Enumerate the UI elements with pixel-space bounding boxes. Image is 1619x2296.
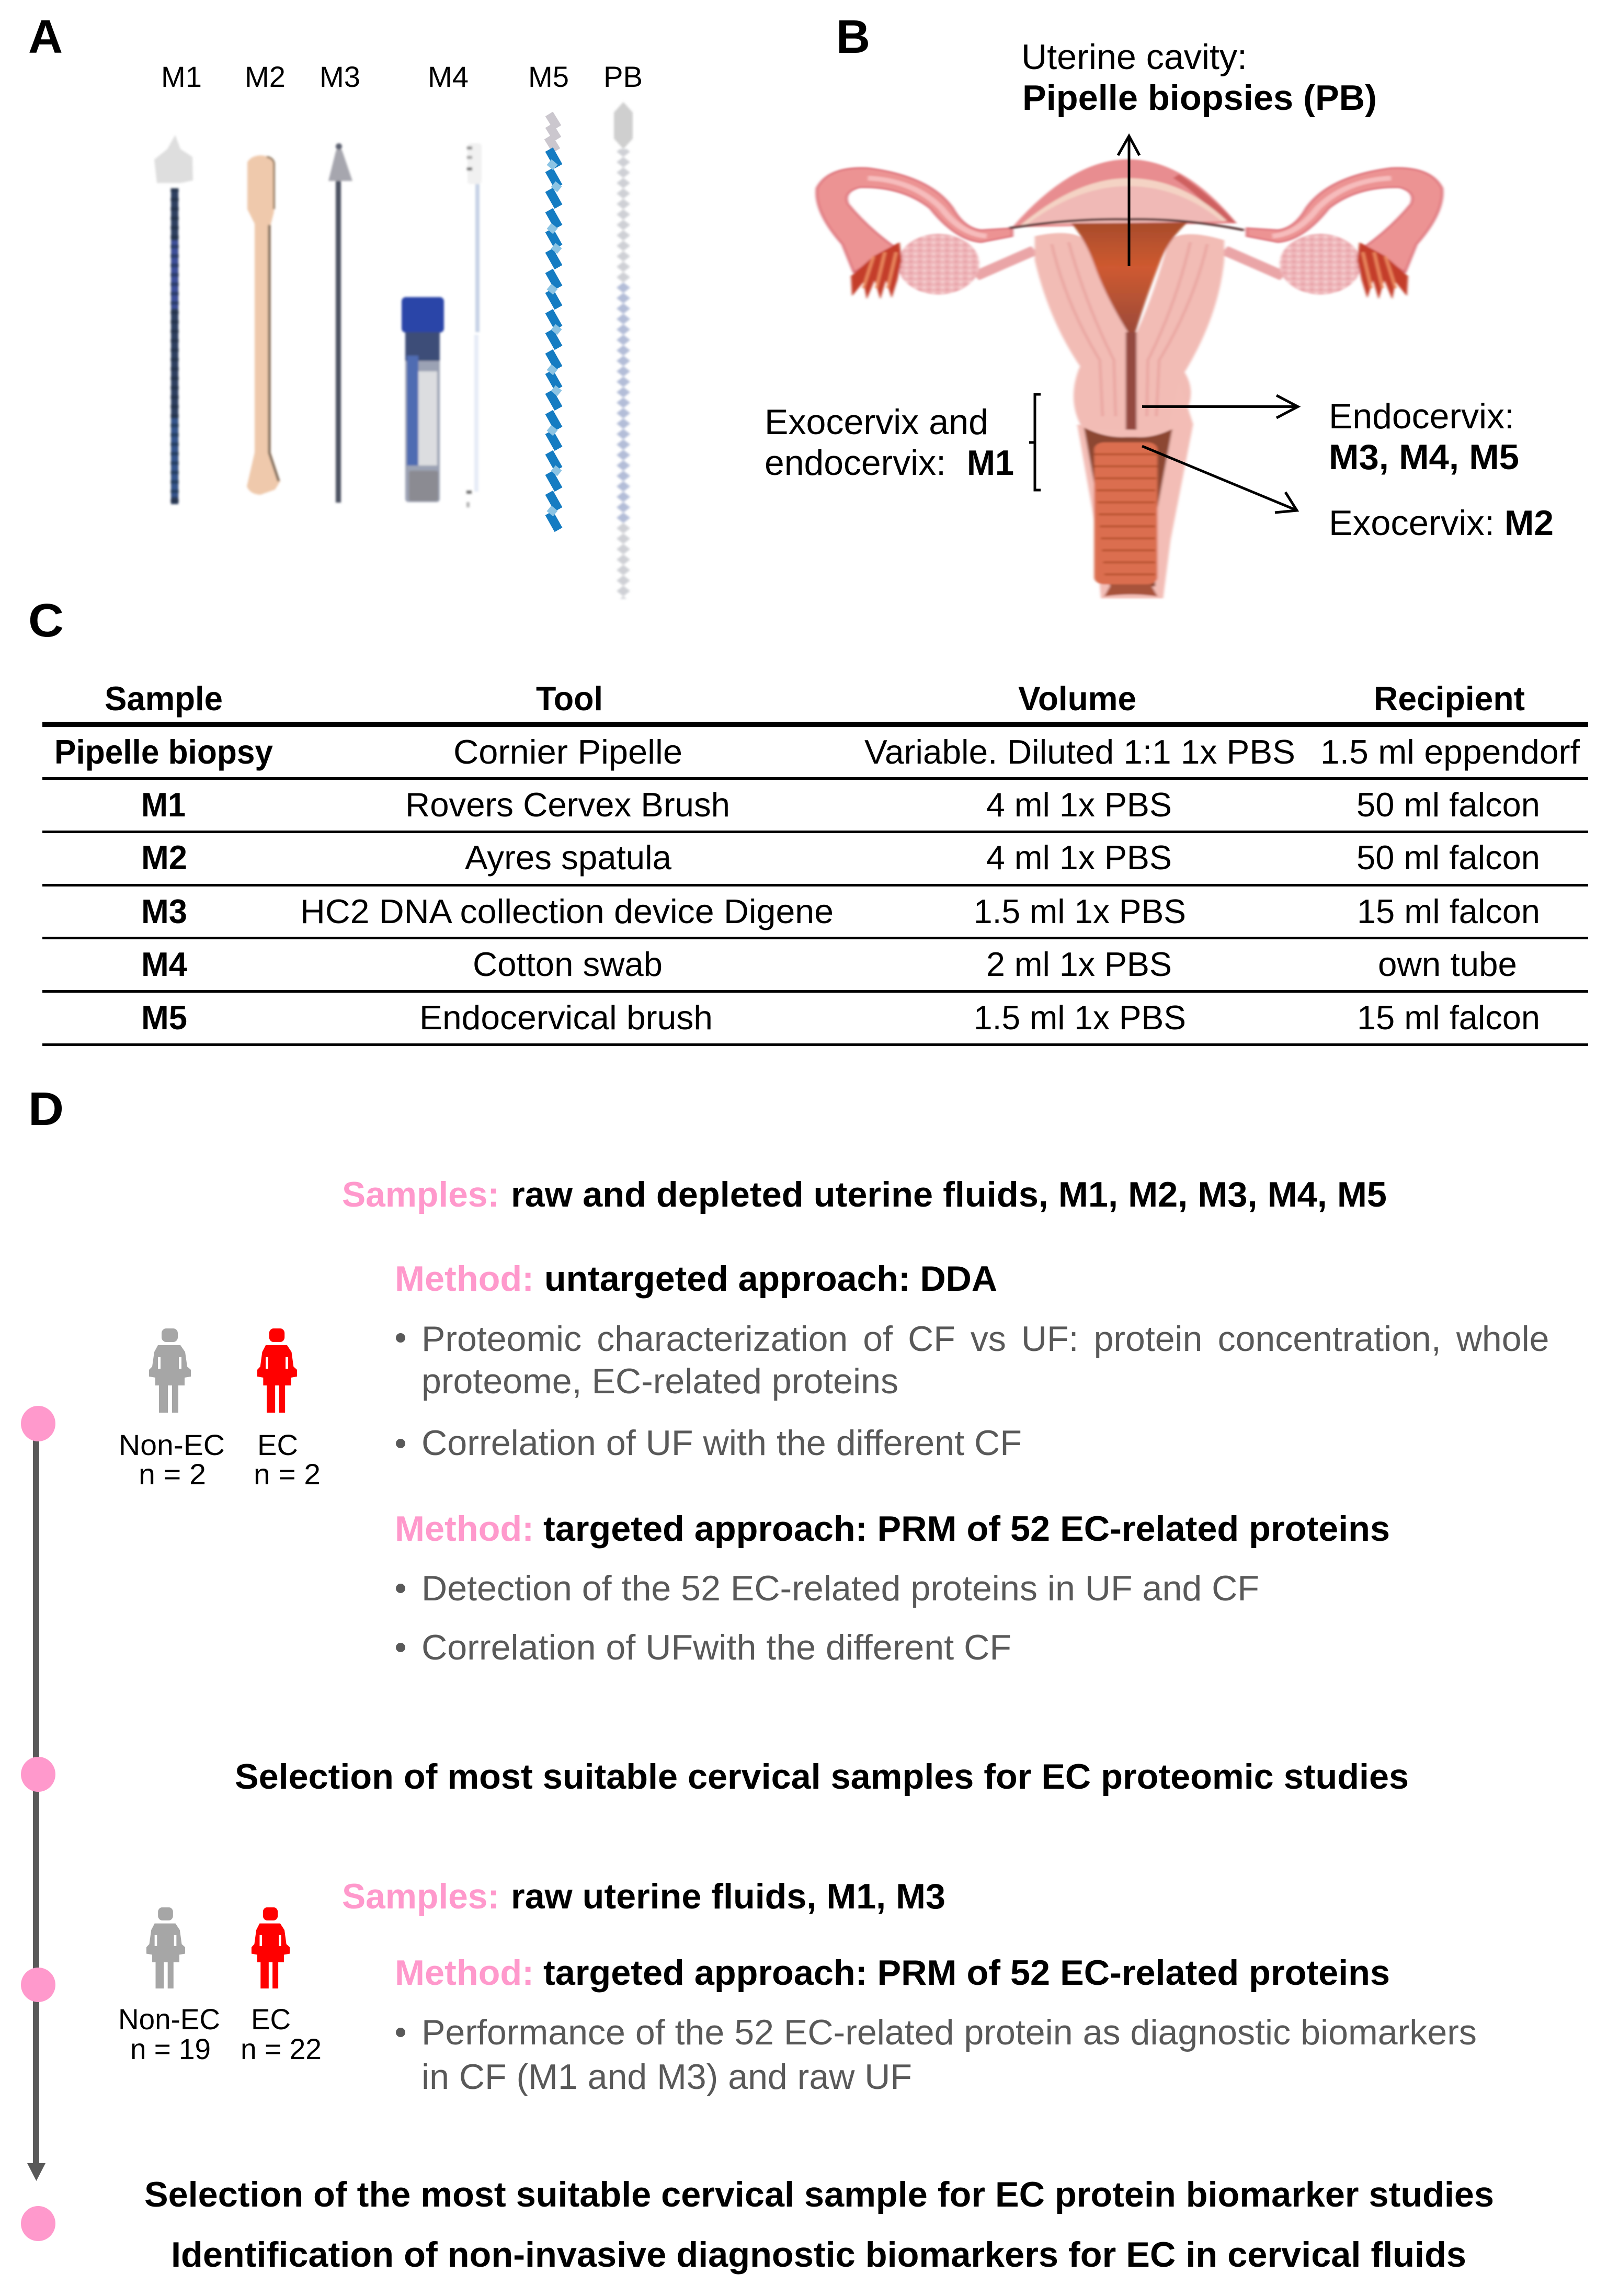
row: M4: 2 ml 1x PBS <box>986 945 1172 983</box>
tool labels: PB <box>603 60 643 93</box>
bullet: biomarker performance: in CF (M1 and M3) and raw UF <box>421 2057 912 2097</box>
row: M2: M2 <box>141 838 187 877</box>
table header: Tool <box>536 679 603 718</box>
tool labels: M1 <box>161 60 202 93</box>
label: exocervix and endocervix <box>765 402 1014 483</box>
illustration: female reproductive tract <box>817 160 1442 598</box>
panel D: study workflow <box>21 1083 1549 2275</box>
row: M2: Ayres spatula <box>465 838 672 877</box>
table row lines <box>42 777 1588 1046</box>
bracket: exocervix and endocervix <box>1029 394 1041 490</box>
tool labels: M3 <box>320 60 360 93</box>
row: M3: 15 ml falcon <box>1357 892 1540 930</box>
method: targeted PRM: targeted approach: PRM of 52 EC-related proteins <box>543 1509 1390 1549</box>
method: targeted PRM, verification: targeted approach: PRM of 52 EC-related proteins <box>543 1953 1390 1993</box>
row: M1 <box>141 786 1540 824</box>
icon: M4 tube <box>402 297 444 502</box>
row: M1: 4 ml 1x PBS <box>986 786 1172 824</box>
panel A: sampling tools <box>28 11 643 599</box>
icon: M3 DNA collection device <box>328 143 352 503</box>
row: M5: Endocervical brush <box>419 998 713 1037</box>
row: M5 <box>141 998 1540 1037</box>
row: M4: Cotton swab <box>473 945 663 983</box>
method: untargeted DDA: untargeted approach: DDA <box>544 1259 997 1299</box>
icon: non-EC woman, n=2 <box>119 1328 225 1491</box>
samples heading: discovery: raw and depleted uterine fluids, M1, M2, M3, M4, M5 <box>511 1175 1387 1214</box>
label: endocervix: M3, M4, M5 <box>1329 437 1519 477</box>
tool labels: M2 <box>245 60 286 93</box>
icon: non-EC woman, n=2: Non-EC <box>119 1428 225 1461</box>
row: M4: M4 <box>141 945 187 983</box>
icon: M5 endocervical brush <box>548 114 560 530</box>
row: M5: M5 <box>141 998 187 1037</box>
panel letter B: B <box>836 11 870 63</box>
row: M2: 50 ml falcon <box>1356 838 1540 877</box>
label: exocervix and endocervix: M1 <box>967 443 1014 483</box>
timeline arrow <box>27 1424 45 2181</box>
icon: EC woman, n=22: n = 22 <box>241 2032 322 2065</box>
label: exocervix: M2 <box>1504 503 1554 543</box>
tool labels <box>161 60 643 93</box>
row: Pipelle biopsy: Pipelle biopsy <box>54 733 273 771</box>
method: untargeted DDA: Method: <box>395 1259 534 1299</box>
row: M5: 15 ml falcon <box>1357 998 1540 1037</box>
icon: non-EC woman, n=19 <box>118 1907 220 2065</box>
icon: PB Pipelle <box>614 102 633 599</box>
label: uterine cavity <box>1021 37 1377 118</box>
row: Pipelle biopsy: Cornier Pipelle <box>453 733 682 771</box>
icon: EC woman, n=2 <box>254 1328 321 1491</box>
label: endocervix: Endocervix: <box>1329 396 1514 436</box>
bullet: detection: Detection of the 52 EC-related proteins in UF and CF <box>421 1568 1259 1608</box>
tool labels: M5 <box>528 60 569 93</box>
arrow: to uterine cavity <box>1118 136 1139 266</box>
row: Pipelle biopsy: 1.5 ml eppendorf <box>1320 733 1580 771</box>
icon: non-EC woman, n=19: n = 19 <box>130 2032 211 2065</box>
conclusion text <box>144 2175 1494 2275</box>
panel letter D: D <box>28 1083 64 1135</box>
arrow: to endocervix <box>1142 395 1298 418</box>
row: Pipelle biopsy: Variable. Diluted 1:1 1x PBS <box>864 733 1295 771</box>
table header: Sample <box>105 679 223 718</box>
row: M5: 1.5 ml 1x PBS <box>974 998 1186 1037</box>
icon: EC woman, n=2: n = 2 <box>254 1458 321 1491</box>
bullet: proteomic characterization: proteome, EC-related proteins <box>421 1361 898 1401</box>
tool labels: M4 <box>428 60 469 93</box>
conclusion text: Selection of the most suitable cervical sample for EC protein biomarker studies <box>144 2175 1494 2214</box>
panel B: anatomy <box>765 11 1554 598</box>
label: uterine cavity: Pipelle biopsies (PB) <box>1022 78 1377 118</box>
row: M1: M1 <box>141 786 186 824</box>
bullet: proteomic characterization: Proteomic characterization of CF vs UF: protein concentration, whole <box>421 1319 1549 1359</box>
method: targeted PRM, verification: Method: <box>395 1953 534 1993</box>
row: M3: M3 <box>141 892 187 930</box>
panel letter A: A <box>28 11 63 63</box>
table header: Recipient <box>1374 679 1525 718</box>
timeline nodes <box>21 1406 55 2241</box>
label: exocervix and endocervix: Exocervix and <box>765 402 988 442</box>
row: M4: own tube <box>1378 945 1517 983</box>
row: M3: HC2 DNA collection device Digene <box>300 892 834 930</box>
icon: EC woman, n=2: EC <box>257 1428 298 1461</box>
label: exocervix: Exocervix: <box>1329 503 1495 543</box>
row: Pipelle biopsy <box>54 733 1580 771</box>
icon: EC woman, n=22: EC <box>251 2003 291 2036</box>
label: uterine cavity: Uterine cavity: <box>1021 37 1247 77</box>
table header: Volume <box>1018 679 1136 718</box>
panel letter C: C <box>28 595 64 647</box>
icon: non-EC woman, n=2: n = 2 <box>139 1458 206 1491</box>
samples heading: verification: Samples: <box>342 1877 499 1916</box>
row: M4 <box>141 945 1517 983</box>
bullet: correlation UFwith: Correlation of UFwith the different CF <box>421 1628 1011 1667</box>
row: M2: 4 ml 1x PBS <box>986 838 1172 877</box>
row: M1: Rovers Cervex Brush <box>405 786 730 824</box>
icon: M2 Ayres spatula <box>247 155 280 495</box>
samples heading: verification: raw uterine fluids, M1, M3 <box>511 1877 945 1916</box>
row: M3 <box>141 892 1540 930</box>
milestone: selection of samples: Selection of most suitable cervical samples for EC proteomic studies <box>235 1757 1409 1797</box>
row: M1: 50 ml falcon <box>1356 786 1540 824</box>
icon: non-EC woman, n=19: Non-EC <box>118 2003 220 2036</box>
table header <box>42 679 1588 727</box>
row: M2 <box>141 838 1540 877</box>
arrow: to exocervix <box>1142 446 1297 513</box>
bullet: correlation UF CF: Correlation of UF with the different CF <box>421 1423 1022 1463</box>
icon: M4 cotton swab <box>466 143 482 507</box>
method: targeted PRM: Method: <box>395 1509 534 1549</box>
panel C: sampling table <box>28 595 1588 1046</box>
icon: EC woman, n=22 <box>241 1907 322 2065</box>
row: M3: 1.5 ml 1x PBS <box>974 892 1186 930</box>
samples heading: discovery: Samples: <box>342 1175 499 1214</box>
bullet: proteomic characterization <box>396 1319 1549 1401</box>
label: exocervix and endocervix: endocervix: <box>765 443 946 483</box>
conclusion text: Identification of non-invasive diagnostic biomarkers for EC in cervical fluids <box>171 2235 1466 2275</box>
icon: M1 cervex brush <box>154 135 193 504</box>
label: endocervix <box>1329 396 1519 477</box>
bullet: biomarker performance: Performance of the 52 EC-related protein as diagnostic biomarkers <box>421 2013 1477 2052</box>
bullet: biomarker performance <box>396 2013 1477 2097</box>
